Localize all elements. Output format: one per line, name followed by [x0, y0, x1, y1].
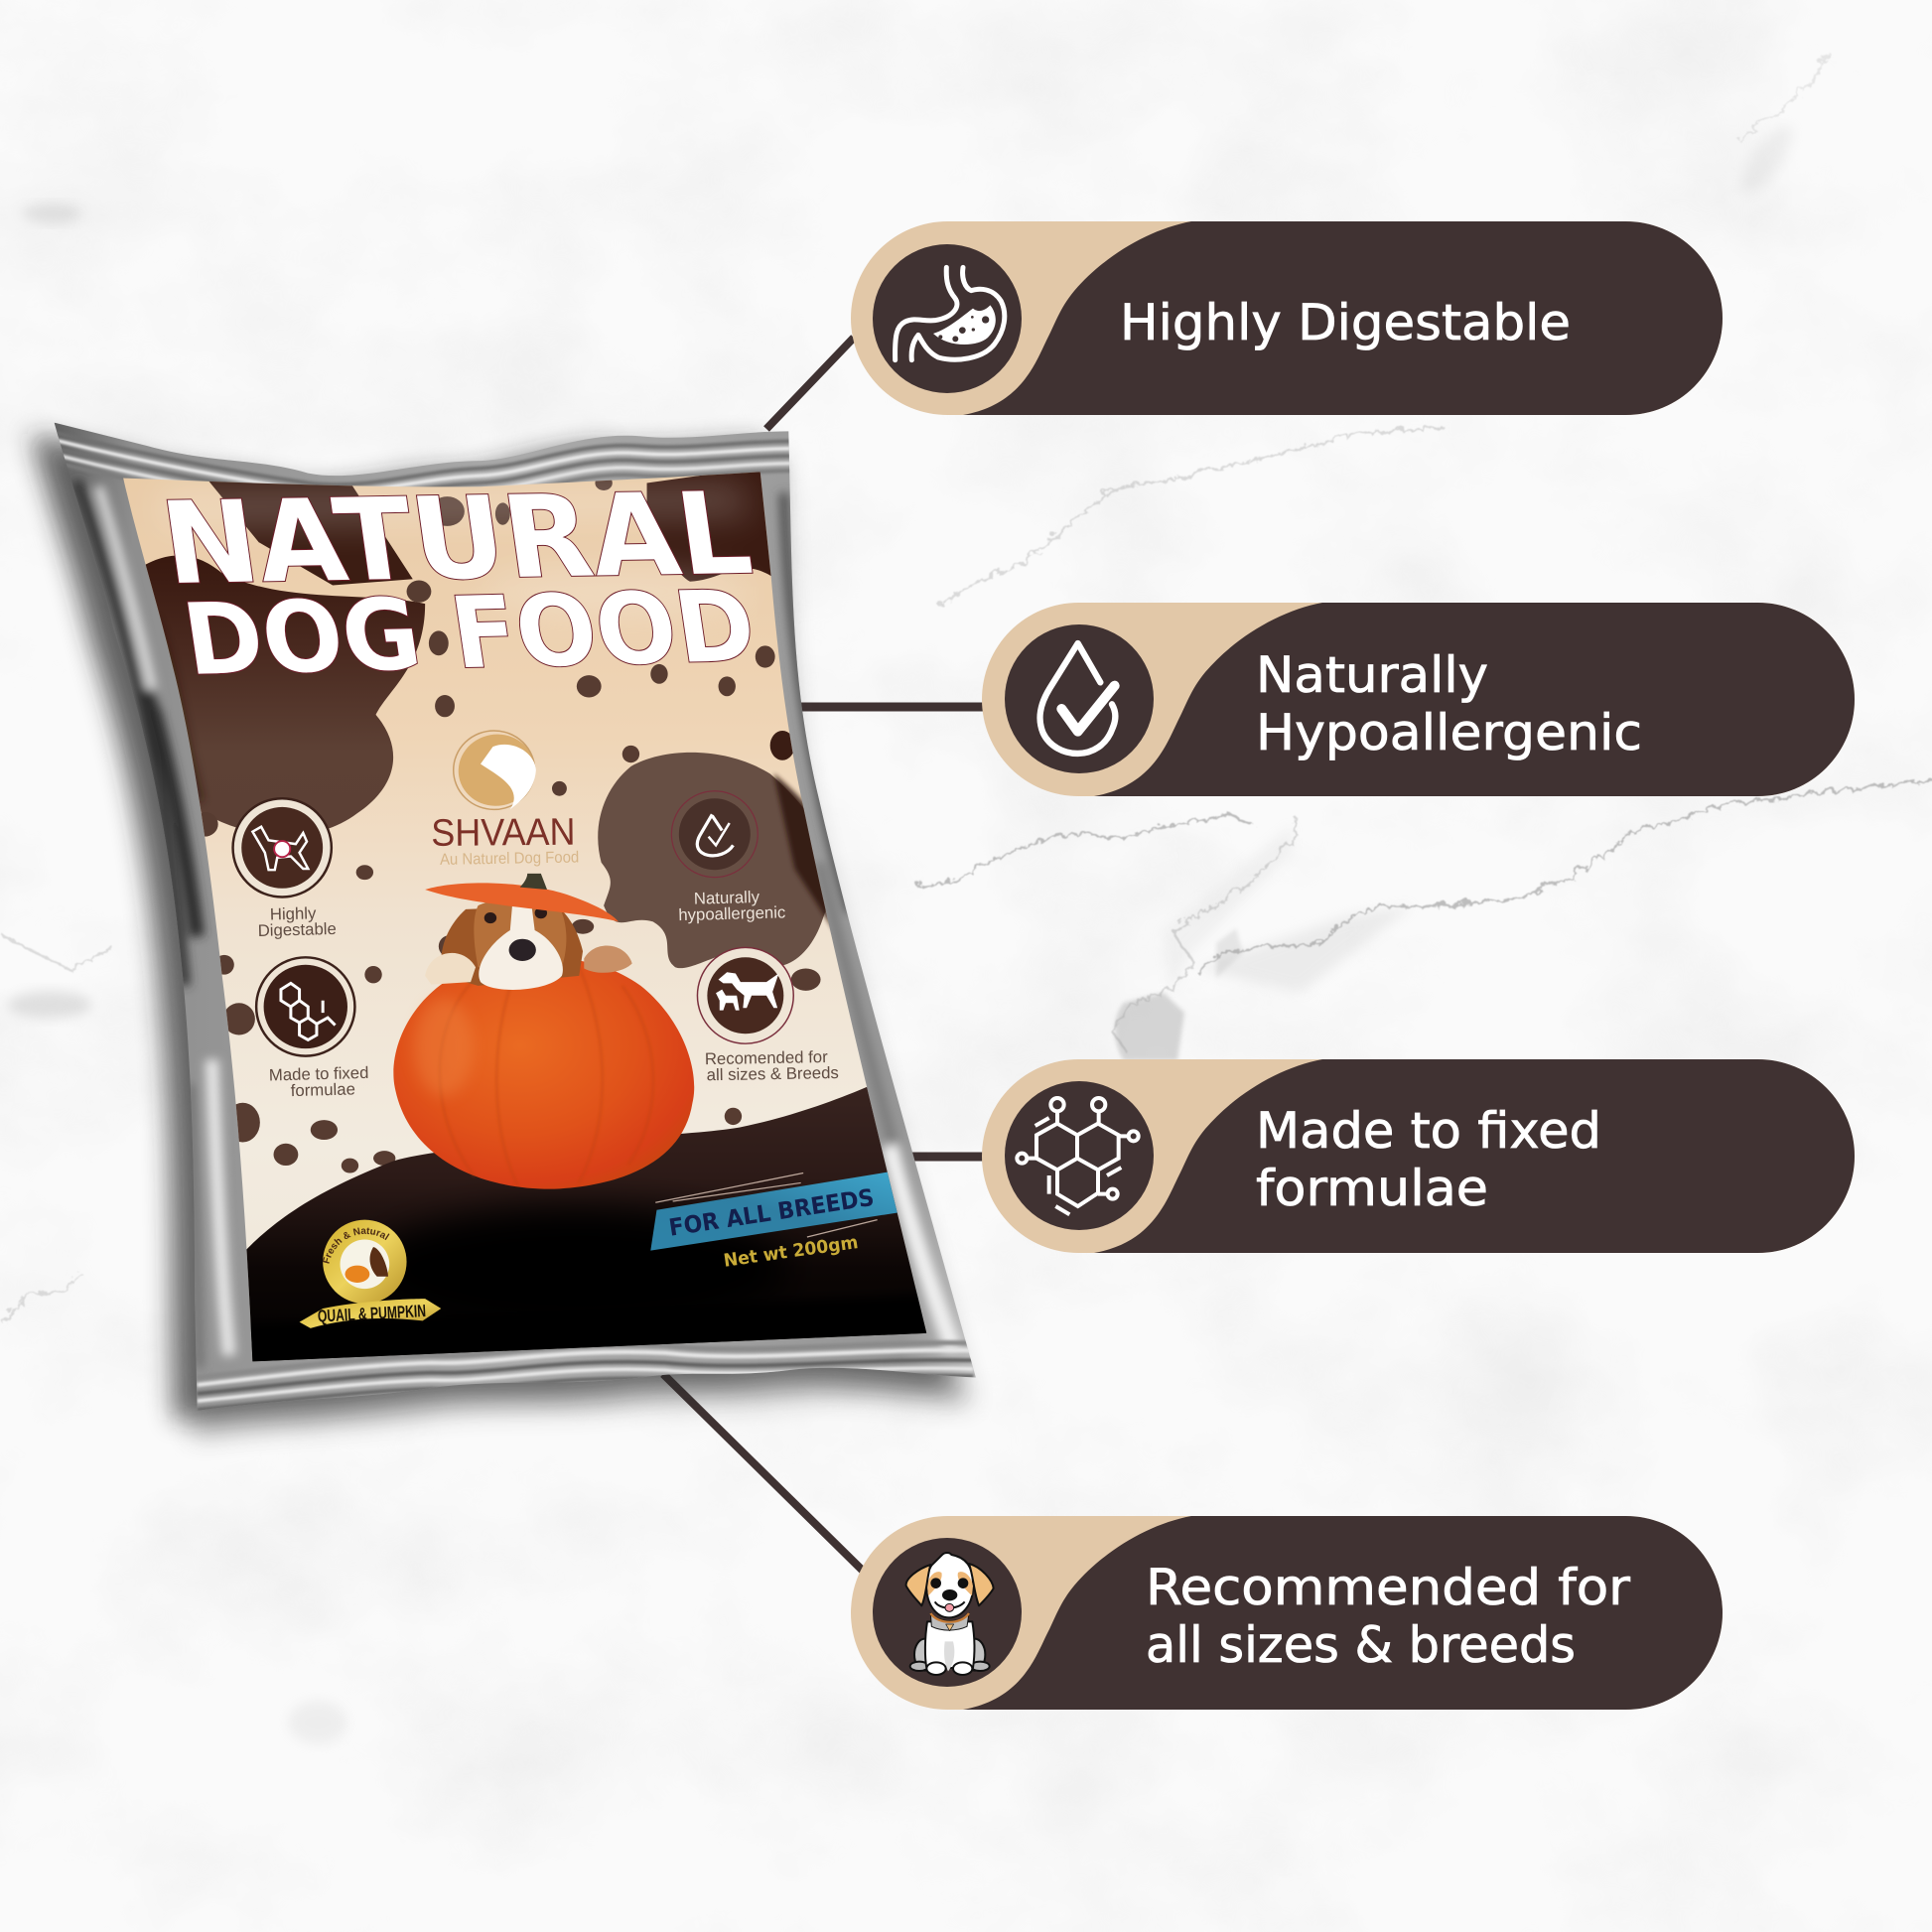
brown blob: top left wedge — [204, 475, 413, 586]
badge: all sizes: Recomended for — [705, 1047, 828, 1068]
pill background — [982, 1059, 1855, 1253]
icon circle: water drop with check — [1005, 624, 1154, 773]
marble veins — [0, 50, 1932, 1320]
printed label — [123, 473, 927, 1362]
connector line: digestibility — [766, 338, 854, 429]
title text — [154, 469, 762, 698]
label: formulae — [1256, 1160, 1488, 1217]
connector line: hypoallergenic — [800, 703, 985, 711]
badge: hypoallergenic: Naturally — [694, 888, 760, 908]
brand logo: Au Naturel Dog Food — [440, 848, 579, 869]
title text: DOG FOOD — [177, 570, 762, 698]
connector line: fixed formulae — [898, 1152, 985, 1162]
label: Highly Digestable — [1120, 294, 1571, 351]
callout: recommended for all sizes — [851, 1516, 1723, 1710]
label: Made to fixed — [1256, 1102, 1601, 1160]
silver foil body — [37, 407, 998, 1430]
label: Recommended for — [1146, 1559, 1630, 1616]
pumpkin with dog — [393, 874, 694, 1189]
badge: highly digestable: Highly — [270, 903, 317, 924]
label: Naturally — [1256, 646, 1488, 704]
badge: fixed formulae: Made to fixed — [269, 1063, 369, 1085]
badge: fixed formulae — [256, 957, 369, 1101]
for all breeds band: FOR ALL BREEDS — [667, 1183, 876, 1242]
gloss highlights — [160, 483, 752, 617]
connector line: all sizes — [663, 1374, 864, 1572]
icon circle: molecule — [1005, 1081, 1154, 1230]
badge: hypoallergenic: hypoallergenic — [678, 902, 786, 924]
pumpkin lid — [425, 883, 619, 921]
beagle — [425, 899, 632, 990]
pill background — [851, 1516, 1723, 1710]
callout: highly digestable — [851, 221, 1723, 415]
quail and pumpkin seal: Fresh & Natural — [322, 1227, 389, 1264]
grey washes — [8, 118, 1801, 1744]
for all breeds band — [650, 1172, 899, 1272]
badge: all sizes — [697, 947, 839, 1084]
badge: all sizes: all sizes & Breeds — [707, 1063, 839, 1084]
brown blob: large left — [111, 556, 425, 836]
title text: NATURAL — [154, 469, 759, 611]
label: Hypoallergenic — [1256, 704, 1642, 761]
badge: highly digestable — [233, 798, 337, 940]
callout: made to fixed formulae — [982, 1059, 1855, 1253]
quail and pumpkin seal — [300, 1219, 441, 1328]
icon circle: stomach — [873, 244, 1022, 393]
pumpkin — [393, 958, 694, 1189]
for all breeds band: Net wt 200gm — [723, 1232, 860, 1272]
badge: fixed formulae: formulae — [290, 1079, 355, 1100]
badge: hypoallergenic — [671, 791, 786, 924]
quail and pumpkin seal: QUAIL & PUMPKIN — [317, 1301, 426, 1326]
icon circle: puppy — [873, 1538, 1022, 1687]
lid stem — [520, 874, 547, 890]
label: all sizes & breeds — [1146, 1616, 1576, 1674]
top crimp seal — [57, 431, 790, 486]
dog food bag — [16, 419, 979, 1449]
brand logo — [431, 729, 579, 869]
pill background — [982, 603, 1855, 796]
dark bottom wave — [234, 1072, 949, 1374]
spot dots — [191, 476, 821, 1173]
badge: highly digestable: Digestable — [257, 919, 337, 940]
brand logo: SHVAAN — [431, 811, 576, 855]
callout: naturally hypoallergenic — [982, 603, 1855, 796]
brown blob: top right — [647, 466, 776, 582]
brown blob: right — [598, 753, 831, 968]
bottom crimp seal — [198, 1342, 973, 1410]
pill background — [851, 221, 1723, 415]
bag shadow — [30, 433, 971, 1438]
